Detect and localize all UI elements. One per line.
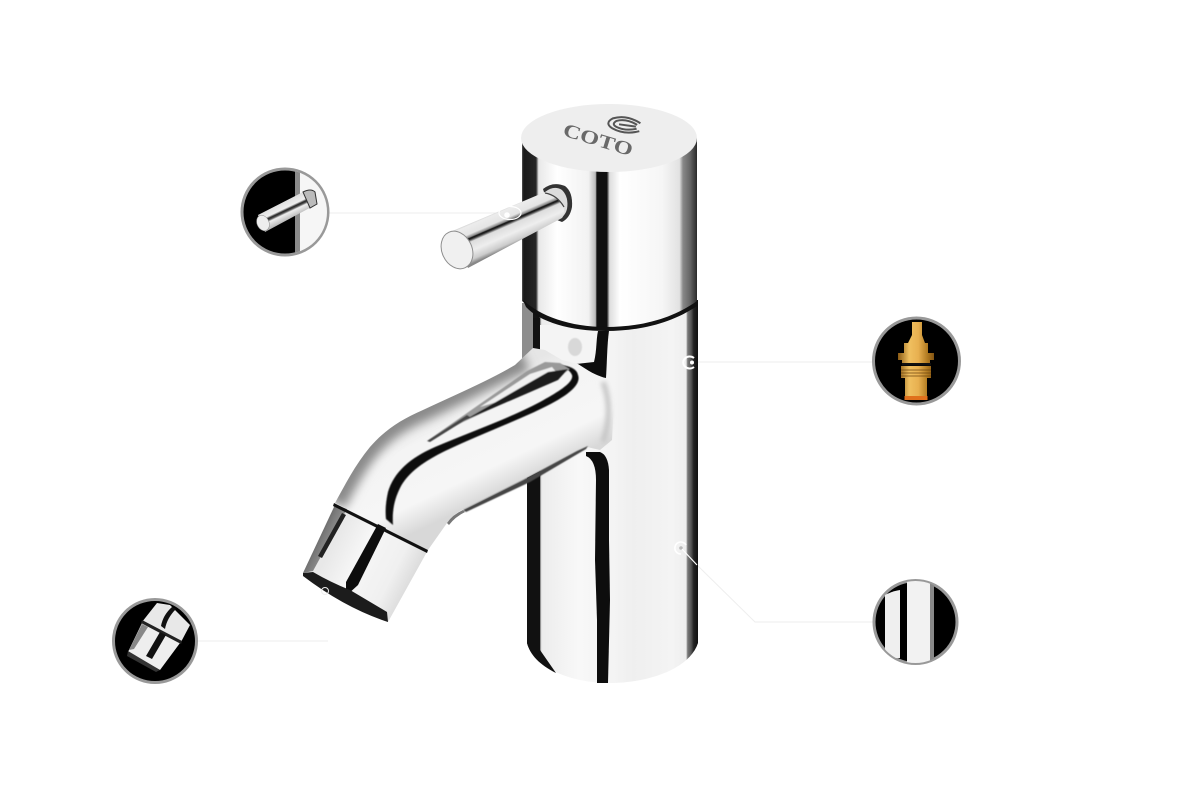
- leader line: body callout: [697, 565, 875, 622]
- hotspot: nozzle: [322, 588, 328, 594]
- faucet upper cylinder: [521, 104, 697, 331]
- spout dark reflection: [386, 365, 579, 525]
- faucet spout: [335, 348, 614, 550]
- spout underside dark edge: [463, 446, 588, 512]
- junction crease: [603, 382, 608, 442]
- lower centre stripe: [586, 452, 610, 683]
- lower left black stripe: [527, 470, 556, 673]
- shade beside centre stripe: [606, 470, 618, 700]
- leader line: nozzle callout: [198, 640, 328, 642]
- lever handle: [435, 184, 572, 274]
- top cap: [521, 104, 697, 172]
- inset circle: chrome body: [874, 578, 957, 666]
- faucet nozzle: [303, 503, 428, 622]
- spout upper streak: [427, 362, 570, 442]
- junction blend into column: [610, 385, 618, 452]
- hotspot: body: [675, 542, 697, 565]
- faucet illustration: [303, 104, 698, 700]
- brand text: COTO: [560, 120, 635, 161]
- inset circle: lever handle: [240, 168, 330, 256]
- nozzle rim: [303, 572, 388, 622]
- hotspot: handle: [499, 206, 521, 220]
- nozzle black stripe: [346, 524, 386, 596]
- nozzle left shade: [303, 505, 347, 573]
- leader line: cartridge callout: [698, 361, 873, 363]
- inset circle: brass cartridge: [874, 318, 960, 404]
- handle end cap: [435, 226, 479, 274]
- hotspot: cartridge: [683, 356, 694, 368]
- upper centre stripe: [576, 331, 609, 378]
- spout upper edge shading: [335, 360, 525, 503]
- leader line: handle callout: [328, 212, 500, 214]
- brand logo mark: [607, 115, 641, 134]
- upper left shadow strip: [522, 303, 533, 365]
- faucet lower body: [522, 300, 698, 700]
- inset circle: nozzle: [114, 600, 196, 682]
